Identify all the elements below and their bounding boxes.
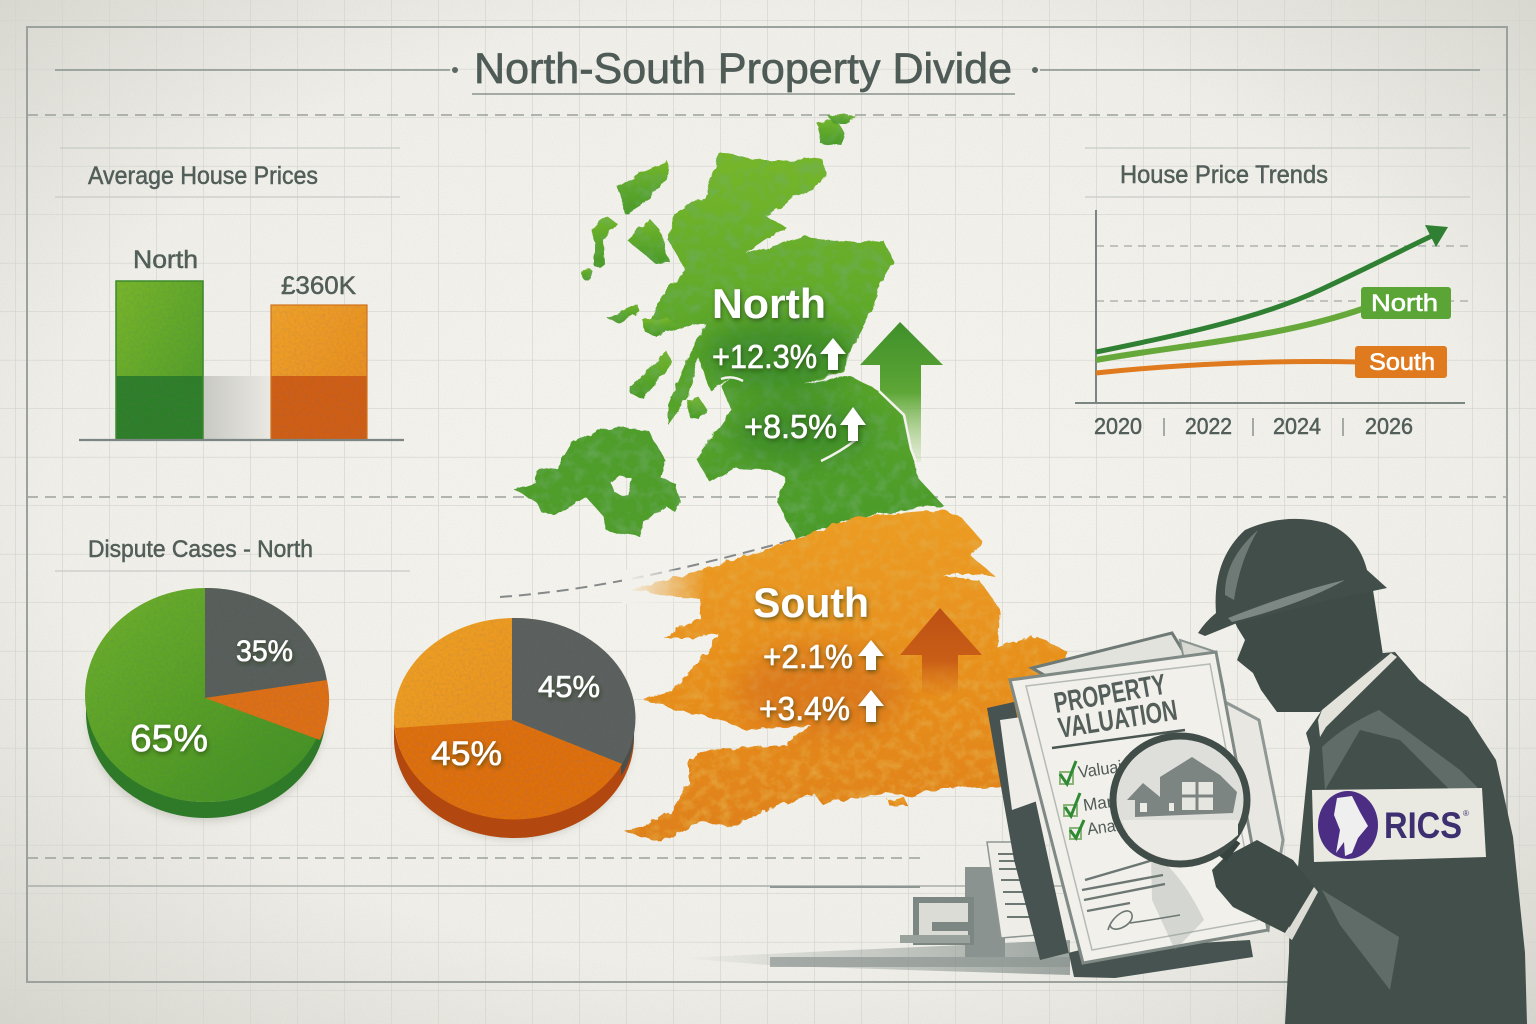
checklist: Valuai <box>1077 757 1123 782</box>
heading: dispute cases north: Dispute Cases - North <box>88 536 313 563</box>
document heading: VALUATION <box>1056 695 1180 745</box>
body silhouette <box>1285 652 1527 1024</box>
title <box>55 45 1480 94</box>
signature <box>1108 911 1180 930</box>
dashed divide line <box>500 539 796 597</box>
map: south region: +2.1% <box>763 638 853 675</box>
pie chart: south <box>394 618 635 840</box>
pie chart: north: 65% <box>130 718 208 760</box>
arrow: north growth <box>860 322 943 462</box>
pie chart: north <box>85 588 329 822</box>
line chart: price trends: 2020 <box>1094 413 1142 439</box>
RICS badge <box>1312 788 1486 862</box>
collar <box>1318 653 1397 737</box>
pie chart: south: 45% <box>431 735 502 773</box>
document heading <box>1052 669 1180 745</box>
map: south region <box>622 510 1068 842</box>
map: south region: South <box>753 579 869 626</box>
arrow: south growth <box>900 608 982 696</box>
pie chart: south: 45% <box>538 669 600 704</box>
map: north region: +12.3% <box>712 338 817 375</box>
shoulder highlight <box>1322 710 1480 790</box>
map: south region: +3.4% <box>759 690 850 727</box>
bar chart: north and south prices: £360K <box>281 272 356 300</box>
hand <box>1212 840 1314 933</box>
bar chart: north and south prices: North <box>133 246 198 274</box>
illustration: property valuation document <box>987 633 1283 978</box>
heading: house price trends: House Price Trends <box>1120 161 1328 189</box>
checklist: Anal <box>1086 816 1120 839</box>
line chart: price trends: 2024 <box>1273 413 1321 439</box>
line chart: price trends: 2026 <box>1365 413 1413 439</box>
head <box>1225 590 1383 712</box>
map: north region <box>514 114 943 539</box>
hard hat <box>1198 519 1387 636</box>
panel: house price trends <box>1075 148 1470 439</box>
illustration: surveyor <box>1198 519 1527 1024</box>
main paper sheet <box>1010 652 1268 963</box>
document heading: PROPERTY <box>1052 669 1168 720</box>
icon: house under glass <box>1127 757 1237 817</box>
heading: average house prices: Average House Prices <box>88 162 318 190</box>
line chart: price trends: 2022 <box>1185 413 1232 439</box>
panel: average house prices <box>55 148 404 440</box>
panel: dispute cases <box>55 536 635 840</box>
RICS badge: RICS <box>1384 805 1462 846</box>
map: north region: North <box>712 280 826 327</box>
sleeve highlight <box>1322 890 1399 990</box>
icon: arrow up <box>858 640 884 670</box>
map: north region: +8.5% <box>744 408 837 445</box>
pie chart: north: 35% <box>236 635 293 668</box>
checklist: Mart <box>1082 791 1118 815</box>
magnifying glass <box>1113 736 1247 864</box>
checklist <box>1060 757 1123 839</box>
illustration: desk clutter <box>680 842 1070 975</box>
bar chart: north and south prices <box>79 246 404 440</box>
line chart: price trends: North <box>1371 290 1438 317</box>
icon: arrow up <box>858 690 884 722</box>
RICS badge: ® <box>1463 809 1469 818</box>
paper note <box>987 842 1062 938</box>
title: North-South Property Divide <box>474 45 1012 93</box>
icon: arrow up <box>820 338 846 370</box>
icon: arrow up <box>840 407 866 441</box>
line chart: price trends: South <box>1369 349 1435 376</box>
line chart: price trends <box>1075 210 1470 439</box>
